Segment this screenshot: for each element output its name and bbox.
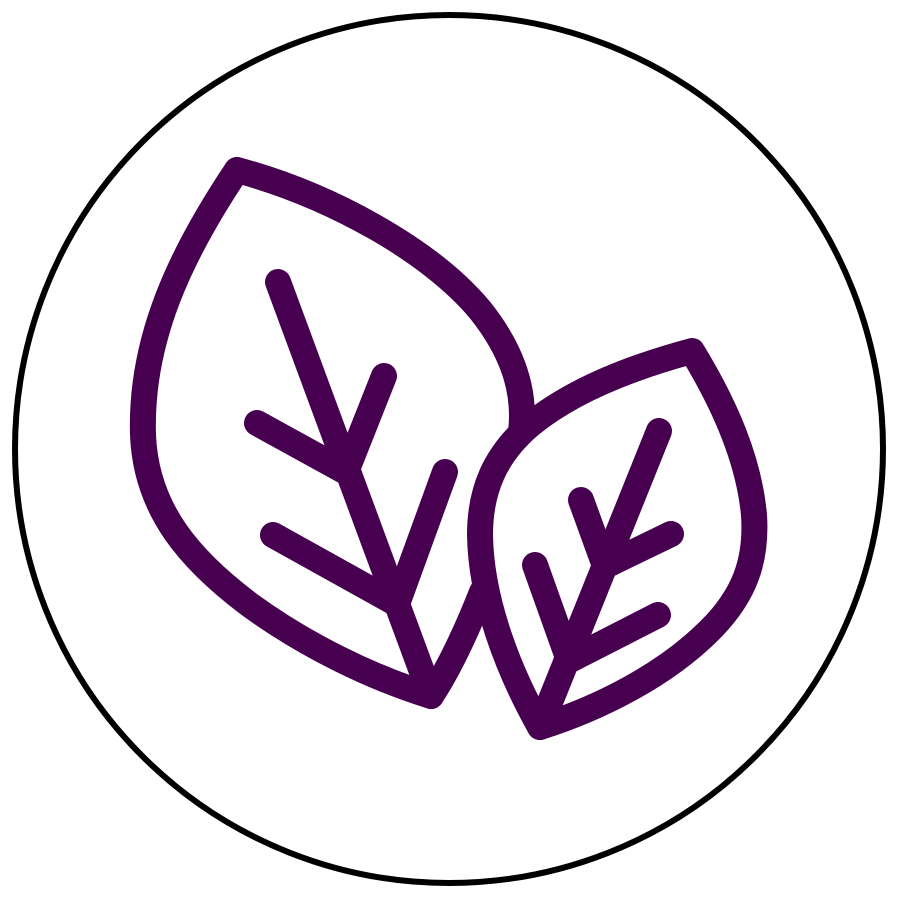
icon: small leaf (480, 351, 754, 727)
icon: large leaf (143, 170, 522, 696)
